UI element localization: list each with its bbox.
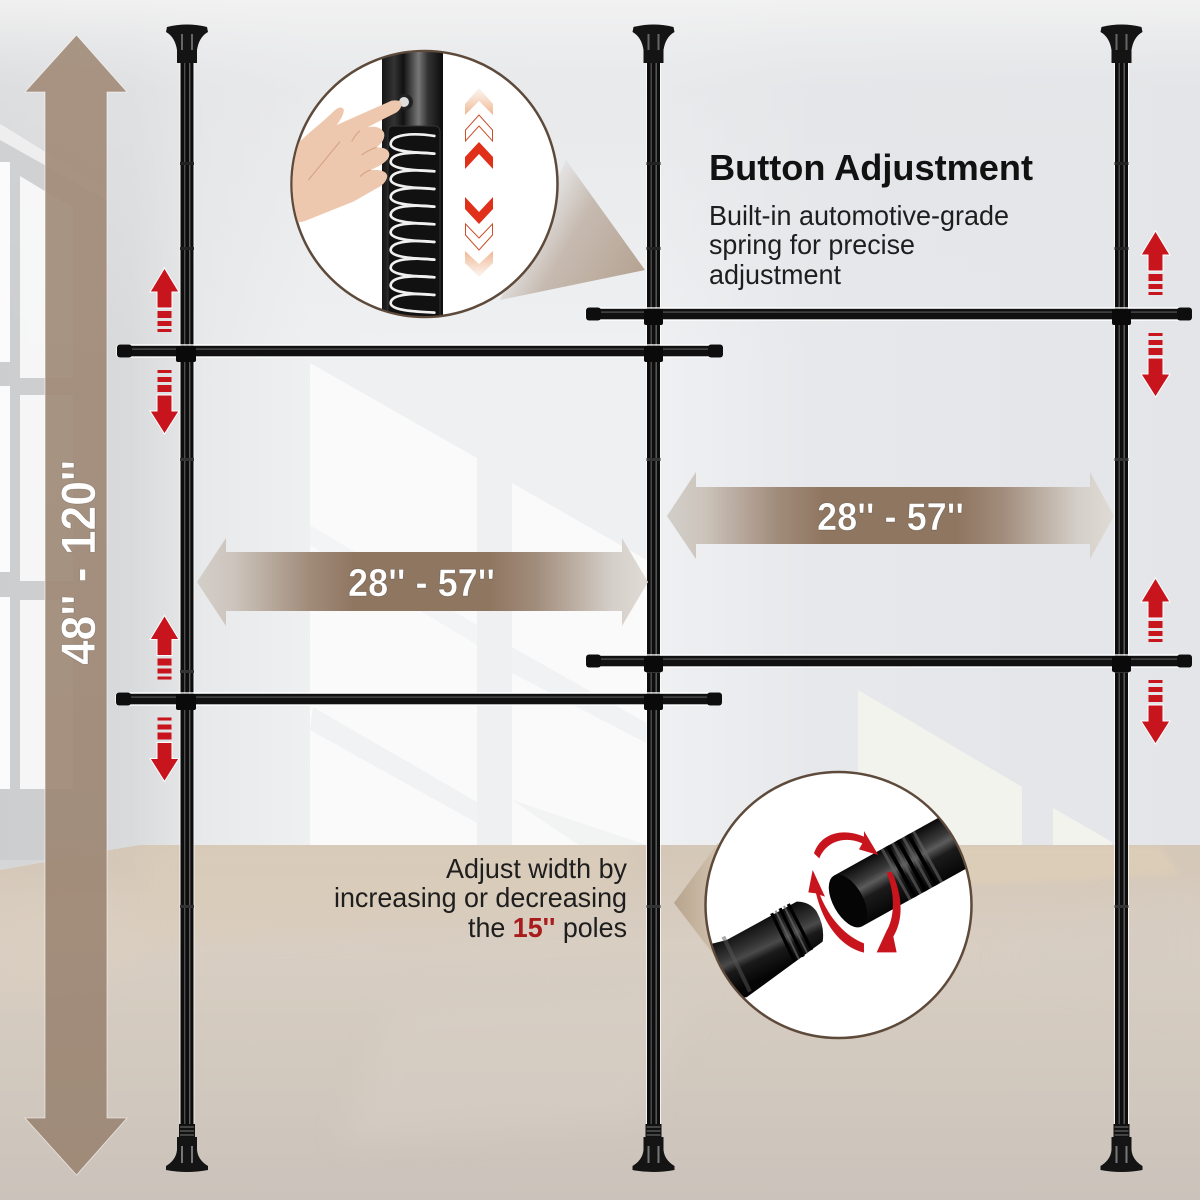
- crossbar: upper left: [116, 344, 723, 362]
- crossbar: lower right: [585, 654, 1192, 672]
- icon: hand pressing button: [287, 100, 402, 223]
- background: room wall: [0, 0, 1200, 870]
- callout pointer: button detail: [500, 160, 645, 300]
- text block: width adjustment note: the 15'' poles: [468, 912, 627, 943]
- background: wooden floor: [0, 830, 1200, 1200]
- text block: width adjustment note: increasing or decreasing: [334, 882, 627, 913]
- width label: left: 28'' - 57'': [348, 562, 495, 605]
- vertical height arrow: [25, 35, 127, 1175]
- crossbar: lower left: [115, 692, 722, 710]
- red arrows: right lower bar: [1141, 578, 1170, 744]
- pole: right: [1100, 24, 1142, 1172]
- callout circle: button and spring detail: [287, 50, 558, 325]
- background: window panes on wall: [0, 124, 107, 789]
- red arrows: right upper bar: [1141, 231, 1170, 397]
- callout pointer: pole detail: [674, 843, 750, 1002]
- height label: 48'' - 120'': [53, 460, 106, 665]
- text block: spring description: adjustment: [709, 259, 841, 290]
- width label: right: 28'' - 57'': [817, 496, 964, 539]
- pole cutaway with button: [382, 50, 443, 320]
- icon: rotation arrows: [808, 831, 901, 953]
- background: sunlight patches on wall: [310, 363, 1112, 846]
- text block: width adjustment note: [334, 853, 627, 943]
- icon: chevrons up: [465, 88, 493, 169]
- text block: width adjustment note: Adjust width by: [446, 853, 627, 884]
- lower pole section: [712, 902, 824, 998]
- pole: middle: [632, 24, 674, 1172]
- text block: spring description: [709, 200, 1009, 290]
- spring: [388, 126, 440, 325]
- pole: left: [166, 24, 208, 1172]
- text block: spring description: spring for precise: [709, 229, 915, 260]
- width arrow: right: [667, 472, 1114, 559]
- icon: chevrons down: [465, 197, 493, 277]
- upper pole section: [828, 818, 966, 928]
- heading: button adjustment: Button Adjustment: [709, 147, 1033, 188]
- red arrows: left lower bar: [150, 616, 179, 782]
- callout circle: pole joint detail: [693, 772, 976, 1038]
- width arrow: left: [197, 538, 648, 626]
- text block: spring description: Built-in automotive-grade: [709, 200, 1009, 231]
- red arrows: left upper bar: [150, 268, 179, 434]
- crossbar: upper right: [585, 307, 1192, 325]
